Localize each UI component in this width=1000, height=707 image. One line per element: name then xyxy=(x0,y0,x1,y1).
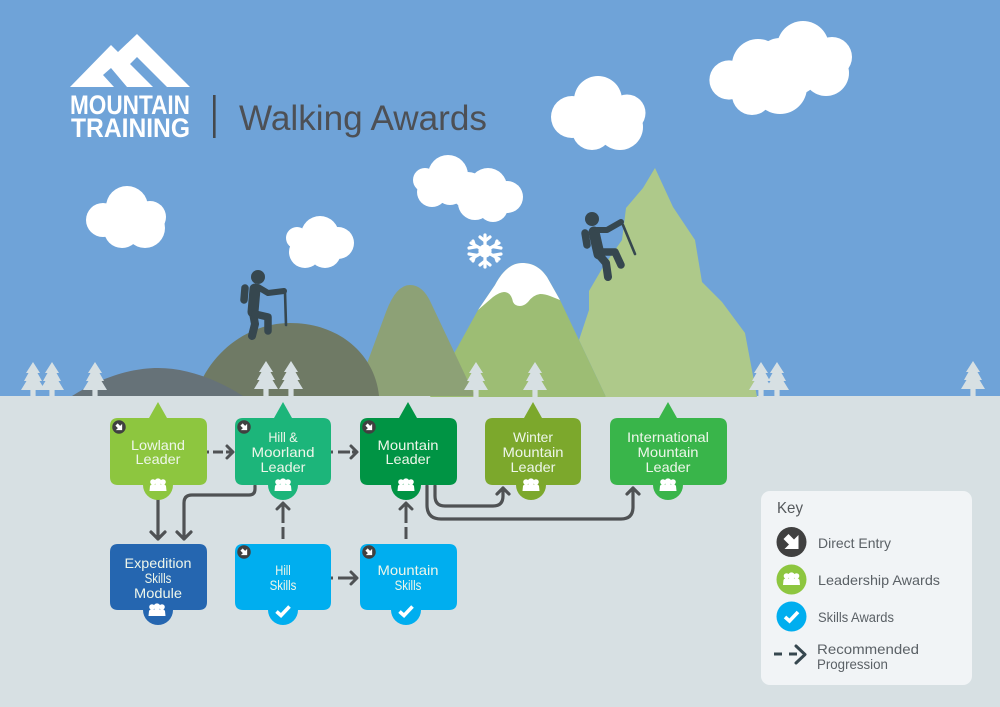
award: Hill and Moorland Leader: Leader xyxy=(260,459,306,475)
hill: olive xyxy=(195,323,379,396)
award: Hill Skills xyxy=(235,544,331,625)
key item: leadership awards: Leadership Awards xyxy=(818,572,940,588)
award: Mountain Skills: Skills xyxy=(395,577,421,593)
key item: recommended progression: Progression xyxy=(817,657,888,672)
award: Expedition Skills Module: Module xyxy=(134,585,182,601)
logo: Mountain Training xyxy=(70,34,190,143)
award: Lowland Leader xyxy=(110,402,207,500)
award: Expedition Skills Module xyxy=(110,544,207,625)
award: Expedition Skills Module: Skills xyxy=(145,570,171,586)
key item: direct entry xyxy=(776,527,891,557)
award: Winter Mountain Leader: Winter xyxy=(513,429,553,445)
snowflake icon xyxy=(469,235,501,267)
award: Lowland Leader: Lowland xyxy=(131,437,185,453)
award: International Mountain Leader: Mountain xyxy=(638,444,698,460)
mountain: snow capped xyxy=(430,263,606,397)
icon: climber on peak xyxy=(585,212,635,277)
award: International Mountain Leader xyxy=(610,402,727,500)
award: Winter Mountain Leader: Mountain xyxy=(502,444,564,460)
mountain: rounded middle xyxy=(355,285,475,396)
award: Mountain Leader: Leader xyxy=(386,451,431,467)
key item: direct entry: Direct Entry xyxy=(818,535,891,551)
award: Expedition Skills Module: Expedition xyxy=(124,555,192,571)
award: Winter Mountain Leader: Leader xyxy=(510,459,556,475)
hill: grey xyxy=(72,368,243,396)
key item: skills awards: Skills Awards xyxy=(818,610,894,625)
cloud: small xyxy=(286,216,354,268)
key item: recommended progression: Recommended xyxy=(817,641,919,657)
sky background xyxy=(0,0,1000,396)
award: Winter Mountain Leader xyxy=(485,402,581,500)
award: Mountain Skills xyxy=(360,544,457,625)
cloud: upper middle xyxy=(551,76,646,150)
award: Hill and Moorland Leader xyxy=(235,402,331,500)
cloud: top right xyxy=(709,21,852,115)
award: Hill Skills: Skills xyxy=(270,577,296,593)
cloud: centre xyxy=(413,155,523,222)
award: Hill and Moorland Leader: Moorland xyxy=(252,444,314,460)
trees xyxy=(21,361,985,397)
panel: key xyxy=(761,491,972,685)
award: Lowland Leader: Leader xyxy=(136,451,181,467)
award: Hill and Moorland Leader: Hill & xyxy=(268,429,298,445)
award: Mountain Leader xyxy=(360,402,457,500)
key item: leadership awards xyxy=(776,564,940,594)
key item: skills awards xyxy=(776,602,894,632)
award: International Mountain Leader: International xyxy=(627,429,709,445)
cloud: left xyxy=(86,186,166,248)
arrows: recommended progression and direct routes xyxy=(151,446,639,584)
award: Mountain Leader: Mountain xyxy=(378,437,438,453)
key heading: Key xyxy=(777,500,803,517)
award: Mountain Skills: Mountain xyxy=(378,562,438,578)
icon: walker on hill xyxy=(244,270,286,336)
award: Hill Skills: Hill xyxy=(275,563,291,578)
mountain: tall climbing peak xyxy=(579,168,757,397)
logo: Mountain Training: MOUNTAIN xyxy=(70,90,190,120)
logo: Mountain Training: TRAINING xyxy=(71,113,190,143)
ground xyxy=(0,396,1000,707)
award: International Mountain Leader: Leader xyxy=(646,459,691,475)
title: Walking Awards xyxy=(239,99,487,138)
key item: recommended progression xyxy=(774,641,919,672)
